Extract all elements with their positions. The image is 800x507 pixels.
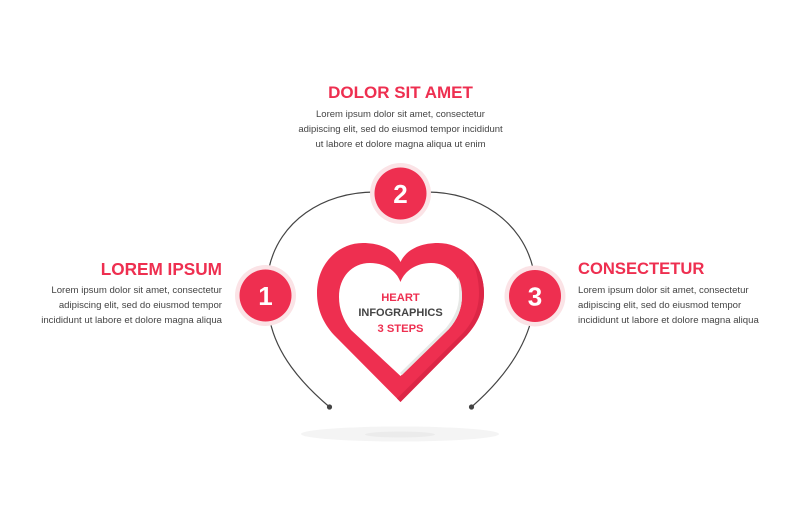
connector lines <box>269 192 533 410</box>
floor shadow <box>301 426 499 442</box>
text: step 1 <box>41 285 222 326</box>
heart label: INFOGRAPHICS <box>358 307 443 319</box>
icon: heart <box>317 243 484 402</box>
step 3 circle <box>504 266 566 326</box>
heading: consectetur: CONSECTETUR <box>578 259 704 278</box>
heading: dolor sit amet: DOLOR SIT AMET <box>328 83 473 102</box>
text: step 2: ut labore et dolore magna aliqua ut enim <box>315 139 486 150</box>
step 2 circle <box>370 163 431 224</box>
step 3 circle: 3 <box>528 282 542 312</box>
text: step 1: Lorem ipsum dolor sit amet, consectetur <box>51 285 222 296</box>
text: step 1: incididunt ut labore et dolore magna aliqua <box>41 315 222 326</box>
step 1 circle: 1 <box>258 281 273 311</box>
step 2 circle: 2 <box>393 179 408 209</box>
heart label: HEART <box>381 292 420 304</box>
text: step 3: Lorem ipsum dolor sit amet, consectetur <box>578 285 749 296</box>
text: step 3: incididunt ut labore et dolore magna aliqua <box>578 315 759 326</box>
text: step 2: adipiscing elit, sed do eiusmod tempor incididunt <box>298 124 503 135</box>
heart label: 3 STEPS <box>377 323 424 335</box>
heart label <box>358 292 443 335</box>
heading: lorem ipsum: LOREM IPSUM <box>101 259 222 279</box>
text: step 2: Lorem ipsum dolor sit amet, consectetur <box>316 109 485 120</box>
text: step 3 <box>578 285 759 326</box>
text: step 2 <box>298 109 503 150</box>
step 1 circle <box>235 265 296 326</box>
text: step 3: adipiscing elit, sed do eiusmod tempor <box>578 300 741 311</box>
text: step 1: adipiscing elit, sed do eiusmod tempor <box>59 300 222 311</box>
